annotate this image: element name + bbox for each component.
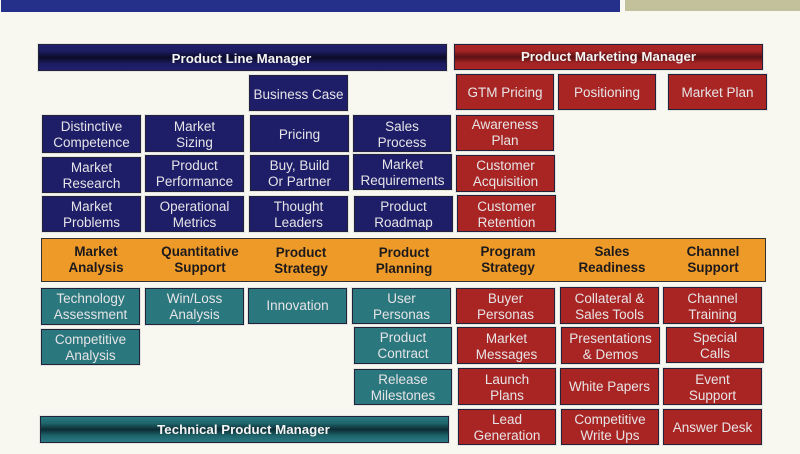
- box: Event Support: Event: [695, 372, 730, 386]
- box: Answer Desk: Answer Desk: [673, 420, 752, 435]
- box: Customer Retention: Retention: [478, 214, 535, 230]
- box: Sales Process: Process: [378, 134, 426, 150]
- box: Presentations & Demos: [561, 327, 660, 364]
- label: Program Strategy: Strategy: [481, 260, 535, 275]
- box: Market Sizing: Market: [174, 118, 215, 134]
- header: Technical Product Manager: [40, 416, 449, 443]
- box: Customer Acquisition: Acquisition: [473, 174, 538, 188]
- label: Sales Readiness: [578, 244, 646, 275]
- box: Market Requirements: Market: [382, 157, 423, 172]
- box: Technology Assessment: [41, 288, 140, 325]
- header: Product Marketing Manager: [454, 44, 763, 70]
- box: Special Calls: [666, 327, 764, 363]
- box: GTM Pricing: [456, 74, 554, 110]
- box: Answer Desk: [663, 409, 762, 445]
- box: Market Research: [42, 157, 141, 193]
- box: Customer Acquisition: [456, 155, 555, 192]
- box: Market Sizing: Sizing: [176, 134, 213, 150]
- box: Distinctive Competence: Distinctive: [61, 119, 122, 134]
- box: Event Support: [663, 368, 762, 405]
- box: Competitive Analysis: Competitive: [55, 332, 126, 347]
- box: Innovation: [248, 288, 347, 324]
- box: Business Case: Business Case: [253, 87, 344, 102]
- box: Market Research: Market: [71, 160, 112, 175]
- box: Product Contract: Contract: [377, 346, 429, 360]
- box: Special Calls: Special: [693, 330, 737, 345]
- box: Operational Metrics: Operational: [160, 199, 229, 214]
- box: Technology Assessment: Technology: [56, 290, 125, 306]
- box: Positioning: Positioning: [574, 85, 640, 100]
- box: Lead Generation: Generation: [474, 428, 540, 443]
- header: Product Line Manager: [38, 44, 447, 71]
- box: Buy, Build Or Partner: Or Partner: [268, 174, 331, 189]
- box: White Papers: [560, 368, 659, 405]
- box: Customer Acquisition: Customer: [476, 158, 535, 172]
- box: Win/Loss Analysis: Win/Loss: [167, 290, 222, 306]
- label: Sales Readiness: Sales: [594, 244, 630, 259]
- label: Market Analysis: [68, 244, 124, 275]
- box: User Personas: [352, 288, 451, 324]
- box: Buy, Build Or Partner: Buy, Build: [270, 158, 329, 173]
- label: Program Strategy: [480, 244, 536, 275]
- box: User Personas: Personas: [373, 307, 430, 322]
- box: Customer Retention: [457, 195, 556, 232]
- box: Market Plan: [668, 74, 767, 110]
- box: Distinctive Competence: Competence: [53, 135, 130, 150]
- top navy bar: [1, 0, 620, 12]
- label: Product Strategy: [274, 245, 328, 276]
- box: Competitive Write Ups: Write Ups: [580, 428, 640, 443]
- box: Product Roadmap: Product: [380, 199, 427, 214]
- box: Operational Metrics: [145, 196, 244, 232]
- box: Pricing: [250, 115, 349, 152]
- box: Market Requirements: [353, 154, 452, 190]
- box: Thought Leaders: Thought: [274, 199, 323, 214]
- box: Release Milestones: Milestones: [371, 388, 435, 403]
- label: Product Planning: Planning: [376, 261, 432, 276]
- box: Market Research: Research: [63, 176, 120, 191]
- header: Technical Product Manager: Technical Product Manager: [157, 422, 330, 436]
- box: Product Performance: [145, 155, 244, 192]
- box: Market Problems: [42, 196, 141, 232]
- box: Pricing: Pricing: [279, 126, 320, 142]
- top tan bar: [625, 0, 800, 11]
- box: White Papers: White Papers: [569, 378, 650, 394]
- box: Product Contract: [354, 327, 452, 364]
- box: Market Sizing: [145, 115, 244, 152]
- label: Product Strategy: Strategy: [274, 261, 328, 276]
- box: Buyer Personas: Buyer: [488, 291, 523, 306]
- box: Thought Leaders: [249, 196, 348, 232]
- box: Technology Assessment: Assessment: [54, 306, 127, 322]
- box: Collateral & Sales Tools: [560, 287, 659, 324]
- box: Awareness Plan: [456, 115, 554, 151]
- label: Channel Support: Support: [687, 260, 739, 275]
- box: Collateral & Sales Tools: Collateral &: [575, 290, 644, 306]
- box: Event Support: Support: [689, 388, 736, 402]
- box: Release Milestones: [354, 369, 452, 405]
- label: Product Planning: [376, 245, 432, 276]
- box: Special Calls: Calls: [700, 346, 730, 361]
- label: Market Analysis: Analysis: [68, 260, 124, 275]
- label: Quantitative Support: Support: [174, 260, 226, 275]
- box: Channel Training: [663, 287, 762, 324]
- box: Distinctive Competence: [42, 115, 141, 153]
- label: Quantitative Support: Quantitative: [161, 244, 239, 259]
- box: Market Messages: Messages: [476, 346, 537, 362]
- label: Channel Support: Channel: [687, 244, 739, 259]
- label: Sales Readiness: Readiness: [578, 260, 646, 275]
- box: Product Roadmap: Roadmap: [374, 215, 433, 230]
- box: Operational Metrics: Metrics: [173, 215, 216, 230]
- box: Product Performance: Performance: [156, 174, 233, 188]
- label: Market Analysis: Market: [74, 244, 118, 259]
- box: Buy, Build Or Partner: [250, 155, 349, 191]
- box: Thought Leaders: Leaders: [274, 215, 323, 230]
- header: Product Line Manager: Product Line Manager: [172, 50, 311, 66]
- box: Competitive Analysis: [41, 329, 140, 365]
- box: Market Plan: Market Plan: [681, 85, 754, 100]
- box: Sales Process: [353, 115, 451, 152]
- label: Quantitative Support: [161, 244, 239, 275]
- box: Lead Generation: [458, 409, 556, 445]
- orange band: activity categories: [41, 238, 766, 282]
- box: Competitive Write Ups: Competitive: [574, 412, 646, 427]
- box: Release Milestones: Release: [378, 372, 428, 387]
- box: User Personas: User: [387, 291, 416, 306]
- box: Awareness Plan: Awareness: [472, 117, 538, 132]
- box: Channel Training: Channel: [687, 290, 738, 306]
- box: Launch Plans: Plans: [490, 388, 524, 402]
- box: Win/Loss Analysis: Analysis: [169, 306, 220, 322]
- box: Product Contract: Product: [380, 330, 426, 344]
- box: Market Messages: [457, 327, 556, 364]
- box: Customer Retention: Customer: [477, 198, 536, 214]
- box: Presentations & Demos: & Demos: [583, 346, 638, 362]
- box: Business Case: [249, 75, 348, 111]
- label: Product Planning: Product: [379, 245, 429, 260]
- box: Channel Training: Training: [688, 306, 737, 322]
- box: Launch Plans: [458, 368, 556, 405]
- box: Innovation: Innovation: [266, 298, 329, 313]
- box: Competitive Write Ups: [561, 409, 659, 445]
- box: Lead Generation: Lead: [492, 412, 522, 427]
- box: Sales Process: Sales: [385, 118, 419, 134]
- box: Launch Plans: Launch: [485, 372, 529, 386]
- box: Awareness Plan: Plan: [491, 133, 518, 148]
- box: Product Roadmap: [354, 196, 453, 232]
- box: Buyer Personas: Personas: [477, 307, 534, 322]
- box: Buyer Personas: [456, 288, 555, 324]
- box: Presentations & Demos: Presentations: [569, 330, 652, 346]
- label: Product Strategy: Product: [276, 245, 326, 260]
- box: Market Messages: Market: [486, 330, 527, 346]
- box: Market Problems: Problems: [63, 215, 120, 230]
- box: Win/Loss Analysis: [145, 288, 244, 325]
- box: Collateral & Sales Tools: Sales Tools: [575, 306, 644, 322]
- box: Positioning: [558, 74, 656, 110]
- label: Channel Support: [687, 244, 739, 275]
- box: GTM Pricing: GTM Pricing: [467, 85, 542, 100]
- box: Competitive Analysis: Analysis: [65, 348, 116, 363]
- box: Market Requirements: Requirements: [360, 173, 445, 188]
- label: Program Strategy: Program: [480, 244, 536, 259]
- header: Product Marketing Manager: Product Marketing Manager: [521, 49, 696, 64]
- box: Market Problems: Market: [71, 199, 112, 214]
- box: Product Performance: Product: [171, 158, 218, 172]
